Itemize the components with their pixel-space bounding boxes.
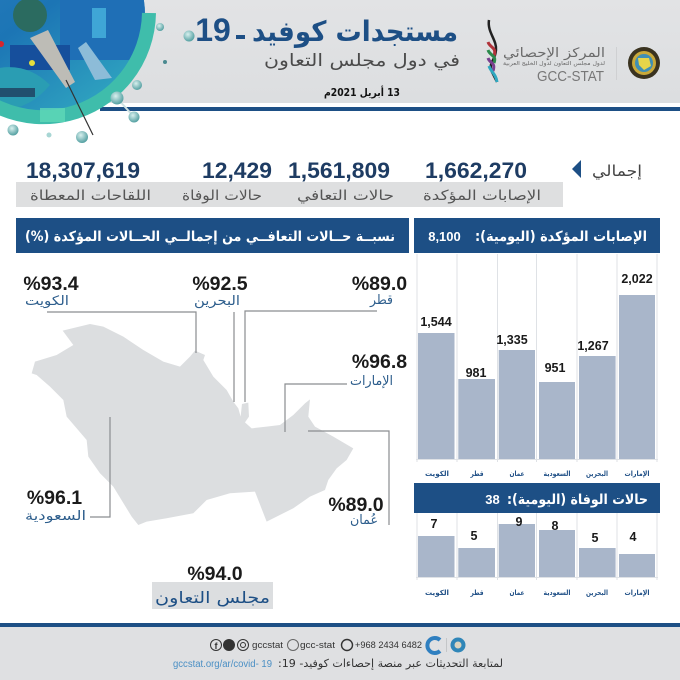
title: 19 <box>195 12 231 48</box>
heading: recovery ratio: نسبــة حــالات التعافــي من إجمالــي الحــالات المؤكدة (%) <box>25 229 395 245</box>
logo: GCC-STAT <box>488 20 617 85</box>
Kuwait: %93.4 <box>23 273 79 295</box>
stat: confirmed <box>423 158 541 204</box>
title: مستجدات كوفيد <box>252 15 458 48</box>
Bahrain <box>192 273 248 402</box>
total label with arrow <box>572 160 642 181</box>
Oman <box>308 431 389 528</box>
footer link: gccstat.org/ar/covid- 19 <box>173 659 272 670</box>
Qatar <box>245 273 407 402</box>
Saudi Arabia: %96.1 <box>27 487 82 509</box>
stat: vaccines: اللقاحات المعطاة <box>30 188 151 204</box>
GCC total: %94.0 <box>187 563 243 585</box>
bar chart: daily deaths: 9 <box>516 515 523 529</box>
map of GCC <box>32 324 353 525</box>
bar chart: daily confirmed: 1,544 <box>420 315 452 329</box>
social icons and handles: gcc-stat <box>300 640 335 651</box>
logo: GCC-STAT: المركز الإحصائي <box>503 46 605 61</box>
bar chart: daily deaths: 4 <box>630 530 637 544</box>
bar chart: daily confirmed: الإمارات <box>624 470 650 478</box>
bar chart: daily confirmed: عمان <box>510 470 525 478</box>
bar chart: daily deaths: 8 <box>552 519 559 533</box>
date: 13 أبريل 2021م <box>324 85 400 99</box>
bar chart: daily confirmed: قطر <box>470 470 484 478</box>
bar chart: daily deaths: عمان <box>510 589 525 597</box>
subtitle: في دول مجلس التعاون <box>264 51 460 71</box>
Saudi Arabia: السعودية <box>25 509 86 524</box>
footer <box>0 623 680 680</box>
stat: confirmed: الإصابات المؤكدة <box>423 188 541 204</box>
total label with arrow: إجمالي <box>592 162 642 181</box>
Qatar: %89.0 <box>352 273 407 295</box>
header band <box>0 0 680 111</box>
bar chart: daily deaths: 5 <box>592 531 599 545</box>
bar chart: daily deaths: قطر <box>470 589 484 597</box>
map panel <box>23 273 407 609</box>
bar chart: daily deaths: 5 <box>471 529 478 543</box>
bar chart: daily deaths <box>416 513 658 597</box>
Kuwait: الكويت <box>25 294 69 309</box>
stat: recoveries <box>288 158 394 204</box>
social icons and handles: +968 2434 6482 <box>355 640 422 651</box>
UAE <box>285 351 407 432</box>
bar chart: daily deaths: 7 <box>431 517 438 531</box>
heading: daily confirmed: الإصابات المؤكدة (اليومية): <box>475 229 647 245</box>
GCC total: مجلس التعاون <box>155 588 270 608</box>
bar chart: daily confirmed: 1,267 <box>577 339 609 353</box>
UAE: الإمارات <box>350 374 393 389</box>
GCC total <box>152 563 273 609</box>
heading: daily confirmed <box>414 218 660 253</box>
bar chart: daily deaths: البحرين <box>586 589 608 597</box>
logo: GCC-STAT: GCC-STAT <box>537 68 604 85</box>
bar chart: daily confirmed: 981 <box>466 366 486 380</box>
bar chart: daily confirmed: البحرين <box>586 470 608 478</box>
stat: recoveries: حالات التعافي <box>297 188 394 204</box>
title <box>195 12 458 48</box>
summary strip <box>16 158 563 207</box>
Bahrain: البحرين <box>194 294 240 309</box>
social icons and handles: f <box>214 641 218 651</box>
bar chart: daily confirmed: 951 <box>545 361 565 375</box>
logo: GCC-STAT: لدول مجلس التعاون لدول الخليج العربية <box>503 61 605 67</box>
stat: recoveries: 1,561,809 <box>288 158 390 183</box>
heading: daily confirmed: 8,100 <box>428 229 461 244</box>
bar chart: daily deaths: السعودية <box>544 589 570 597</box>
bar chart: daily deaths: الإمارات <box>624 589 650 597</box>
stat: deaths <box>182 158 272 204</box>
social icons and handles: gccstat <box>252 640 283 651</box>
bar chart: daily confirmed: 2,022 <box>621 272 653 286</box>
Kuwait <box>23 273 196 353</box>
stat: deaths: حالات الوفاة <box>182 188 262 204</box>
bar chart: daily confirmed: 1,335 <box>496 333 528 347</box>
bar chart: daily confirmed: السعودية <box>544 470 570 478</box>
Oman: عُمان <box>350 512 378 528</box>
Qatar: قطر <box>369 293 393 308</box>
stat: vaccines <box>26 158 151 204</box>
bar chart: daily confirmed <box>416 254 658 478</box>
bar chart: daily confirmed: الكويت <box>425 470 449 478</box>
bar chart: daily deaths: الكويت <box>425 589 449 597</box>
heading: daily deaths <box>414 483 660 513</box>
Bahrain: %92.5 <box>192 273 248 295</box>
heading: recovery ratio <box>16 218 409 253</box>
footer note: لمتابعة التحديثات عبر منصة إحصاءات كوفيد- 19: <box>278 657 503 670</box>
UAE: %96.8 <box>352 351 407 373</box>
social icons and handles <box>210 639 422 651</box>
Oman: %89.0 <box>328 494 384 516</box>
stat: confirmed: 1,662,270 <box>425 158 527 183</box>
stat: vaccines: 18,307,619 <box>26 158 140 183</box>
heading: daily deaths: حالات الوفاة (اليومية): <box>507 492 648 508</box>
decorative circle image with molecules <box>0 0 194 143</box>
partner logos <box>427 638 466 653</box>
heading: daily deaths: 38 <box>485 492 500 507</box>
stat: deaths: 12,429 <box>202 158 272 183</box>
Saudi Arabia <box>25 417 110 524</box>
logo: GCC emblem <box>628 47 660 79</box>
